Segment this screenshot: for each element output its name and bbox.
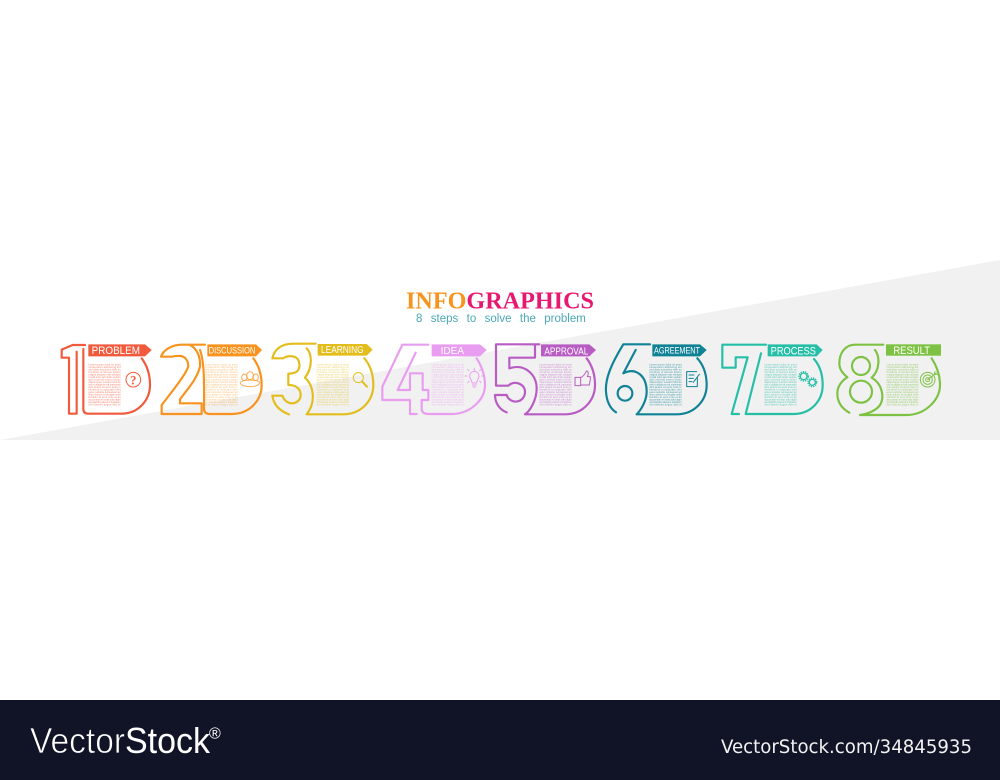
body text: consectetur adipiscing elit: [649, 366, 682, 369]
body text: zzril delenit augue duis te: [88, 404, 121, 407]
body text: esse molestie consequat vel: [887, 391, 919, 394]
body text: quis nostrud exerci tation: [887, 379, 919, 382]
body text: hendrerit in vulputate velit: [764, 389, 797, 392]
body text: tincidunt ut laoreet dolore: [764, 371, 797, 374]
step 8: result: [837, 344, 941, 415]
body text: accumsan et iusto odio digni: [539, 399, 572, 402]
body text: nisl ut aliquip ex ea commodo: [649, 384, 682, 387]
body text: tincidunt ut laoreet dolore: [887, 371, 919, 374]
banner: process: PROCESS: [771, 345, 816, 357]
body text: esse molestie consequat vel: [539, 391, 572, 394]
body text: accumsan et iusto odio digni: [317, 399, 349, 402]
numeral 4: [382, 345, 485, 414]
body text: Lorem ipsum dolor sit amet: [432, 364, 464, 367]
body text: facilisis at vero eros et an: [649, 396, 682, 399]
body text: accumsan et iusto odio digni: [764, 399, 797, 402]
body text: tincidunt ut laoreet dolore: [317, 371, 350, 374]
body text: consectetur adipiscing elit: [764, 366, 797, 369]
body text: esse molestie consequat vel: [649, 391, 682, 394]
body text: [649, 364, 682, 407]
body text: ut wisi enim ad minim veniam: [764, 376, 797, 379]
body text: sed diam nonummy nibh eu: [539, 369, 572, 372]
body text: [88, 364, 121, 407]
body text: sed diam nonummy nibh eu: [887, 369, 919, 372]
icon: question mark: ?: [130, 373, 136, 387]
body text: tincidunt ut laoreet dolore: [649, 371, 682, 374]
body text: ullamcorper suscipit lobortis: [88, 381, 121, 384]
icon: target: [920, 372, 937, 387]
body text: duis autem vel eum iriure in: [764, 386, 797, 389]
numeral 7: [722, 345, 823, 414]
body text: ut wisi enim ad minim veniam: [317, 376, 349, 379]
body text: facilisis at vero eros et an: [539, 396, 572, 399]
footer band: [0, 700, 1000, 780]
body text: facilisis at vero eros et an: [432, 396, 465, 399]
body text: sed diam nonummy nibh eu: [649, 369, 682, 372]
body text: illum dolore eu feugiat nulla: [88, 394, 121, 397]
body text: magna aliquam erat volutpat: [88, 374, 121, 377]
body text: Lorem ipsum dolor sit amet: [88, 364, 121, 367]
body text: qui blandit praesent luptatum: [317, 401, 349, 404]
body text: duis autem vel eum iriure in: [887, 386, 919, 389]
body text: facilisis at vero eros et an: [764, 396, 797, 399]
body text: Lorem ipsum dolor sit amet: [317, 364, 349, 367]
body text: nisl ut aliquip ex ea commodo: [317, 384, 350, 387]
body text: esse molestie consequat vel: [205, 391, 238, 394]
step 3: learning: [272, 344, 373, 414]
footer logo: Stock: [125, 720, 211, 761]
body text: quis nostrud exerci tation: [317, 379, 350, 382]
body text: ut wisi enim ad minim veniam: [539, 376, 572, 379]
body text: facilisis at vero eros et an: [88, 396, 121, 399]
body text: zzril delenit augue duis te: [205, 404, 238, 407]
body text: sed diam nonummy nibh eu: [432, 369, 465, 372]
body text: hendrerit in vulputate velit: [649, 389, 682, 392]
body text: consectetur adipiscing elit: [432, 366, 464, 369]
body text: nisl ut aliquip ex ea commodo: [205, 384, 238, 387]
body text: [764, 364, 797, 407]
body text: consectetur adipiscing elit: [887, 366, 919, 369]
body text: sed diam nonummy nibh eu: [205, 369, 238, 372]
body text: accumsan et iusto odio digni: [88, 399, 121, 402]
body text: qui blandit praesent luptatum: [432, 401, 464, 404]
body text: quis nostrud exerci tation: [649, 379, 682, 382]
step 1: problem: [62, 344, 152, 414]
body text: nisl ut aliquip ex ea commodo: [887, 384, 919, 387]
body text: illum dolore eu feugiat nulla: [317, 394, 350, 397]
footer logo: Vector: [30, 720, 125, 761]
body text: nisl ut aliquip ex ea commodo: [88, 384, 121, 387]
body text: facilisis at vero eros et an: [887, 396, 919, 399]
body text: illum dolore eu feugiat nulla: [539, 394, 572, 397]
body text: consectetur adipiscing elit: [205, 366, 238, 369]
body text: illum dolore eu feugiat nulla: [764, 394, 797, 397]
numeral 8 counters: [850, 357, 872, 403]
body text: hendrerit in vulputate velit: [317, 389, 349, 392]
body text: duis autem vel eum iriure in: [205, 386, 238, 389]
body text: qui blandit praesent luptatum: [764, 401, 797, 404]
banner: approval: APPROVAL: [544, 346, 589, 357]
body text: ullamcorper suscipit lobortis: [432, 381, 465, 384]
numeral 1: [62, 345, 150, 414]
icon: gears: [799, 372, 817, 387]
footer logo: [30, 720, 221, 761]
body text: qui blandit praesent luptatum: [649, 401, 682, 404]
numeral 6 counter: [618, 386, 632, 401]
body text: zzril delenit augue duis te: [764, 404, 797, 407]
body text: Lorem ipsum dolor sit amet: [205, 364, 238, 367]
body text: Lorem ipsum dolor sit amet: [887, 364, 919, 367]
body text: Lorem ipsum dolor sit amet: [539, 364, 572, 367]
icon: lightbulb: [465, 368, 484, 387]
icon: thumbs up: [575, 371, 590, 386]
body text: illum dolore eu feugiat nulla: [205, 394, 238, 397]
body text: magna aliquam erat volutpat: [432, 374, 464, 377]
step 2: discussion: [161, 344, 262, 414]
body text: sed diam nonummy nibh eu: [88, 369, 121, 372]
body text: accumsan et iusto odio digni: [205, 399, 238, 402]
icon: document with pen: [687, 372, 699, 387]
body text: hendrerit in vulputate velit: [887, 389, 919, 392]
body text: Lorem ipsum dolor sit amet: [764, 364, 797, 367]
body text: qui blandit praesent luptatum: [88, 401, 121, 404]
body text: illum dolore eu feugiat nulla: [432, 394, 465, 397]
body text: illum dolore eu feugiat nulla: [887, 394, 919, 397]
body text: [887, 364, 919, 407]
body text: accumsan et iusto odio digni: [432, 399, 464, 402]
subtitle: 8 steps to solve the problem: [416, 313, 586, 325]
body text: ullamcorper suscipit lobortis: [649, 381, 682, 384]
body text: sed diam nonummy nibh eu: [317, 369, 350, 372]
body text: sed diam nonummy nibh eu: [764, 369, 797, 372]
body text: hendrerit in vulputate velit: [432, 389, 464, 392]
body text: facilisis at vero eros et an: [205, 396, 238, 399]
body text: facilisis at vero eros et an: [317, 396, 350, 399]
body text: duis autem vel eum iriure in: [317, 386, 350, 389]
body text: duis autem vel eum iriure in: [432, 386, 465, 389]
body text: duis autem vel eum iriure in: [649, 386, 682, 389]
icon: people: [240, 372, 260, 387]
body text: esse molestie consequat vel: [88, 391, 121, 394]
body text: duis autem vel eum iriure in: [88, 386, 121, 389]
body text: magna aliquam erat volutpat: [887, 374, 919, 377]
body text: ut wisi enim ad minim veniam: [205, 376, 238, 379]
body text: quis nostrud exerci tation: [205, 379, 238, 382]
step 6: agreement: [606, 344, 707, 414]
body text: [317, 364, 350, 407]
banner: discussion: DISCUSSION: [209, 345, 255, 355]
body text: ut wisi enim ad minim veniam: [649, 376, 682, 379]
body text: zzril delenit augue duis te: [432, 404, 465, 407]
body text: ut wisi enim ad minim veniam: [887, 376, 918, 379]
body text: hendrerit in vulputate velit: [539, 389, 572, 392]
body text: quis nostrud exerci tation: [432, 379, 465, 382]
step 5: approval: [495, 344, 596, 414]
banner: idea: IDEA: [441, 346, 464, 357]
body text: accumsan et iusto odio digni: [649, 399, 682, 402]
body text: qui blandit praesent luptatum: [887, 401, 918, 404]
body text: zzril delenit augue duis te: [539, 404, 572, 407]
body text: zzril delenit augue duis te: [887, 404, 919, 407]
numeral 8: [837, 345, 940, 415]
body text: ut wisi enim ad minim veniam: [432, 376, 464, 379]
title: INFOGRAPHICS: [406, 288, 594, 314]
footer logo: ®: [209, 726, 221, 742]
step 4: idea: [382, 344, 487, 414]
body text: tincidunt ut laoreet dolore: [205, 371, 238, 374]
body text: magna aliquam erat volutpat: [317, 374, 349, 377]
body text: qui blandit praesent luptatum: [539, 401, 572, 404]
body text: zzril delenit augue duis te: [317, 404, 350, 407]
footer image id: VectorStock.com/34845935: [721, 736, 972, 758]
body text: consectetur adipiscing elit: [88, 366, 121, 369]
body text: esse molestie consequat vel: [432, 391, 464, 394]
body text: tincidunt ut laoreet dolore: [88, 371, 121, 374]
step 7: process: [722, 344, 823, 414]
icon: magnifier: [353, 373, 367, 387]
body text: [205, 364, 238, 407]
numeral 3: [272, 344, 373, 414]
body text: consectetur adipiscing elit: [539, 366, 572, 369]
body text: consectetur adipiscing elit: [317, 366, 349, 369]
body text: ut wisi enim ad minim veniam: [88, 376, 121, 379]
body text: duis autem vel eum iriure in: [539, 386, 572, 389]
body text: quis nostrud exerci tation: [88, 379, 121, 382]
body text: ullamcorper suscipit lobortis: [887, 381, 919, 384]
body text: esse molestie consequat vel: [317, 391, 349, 394]
grey diagonal background: [0, 260, 1000, 440]
body text: quis nostrud exerci tation: [539, 379, 572, 382]
body text: ullamcorper suscipit lobortis: [317, 381, 350, 384]
banner: result: RESULT: [893, 345, 930, 357]
body text: Lorem ipsum dolor sit amet: [649, 364, 682, 367]
body text: nisl ut aliquip ex ea commodo: [764, 384, 797, 387]
body text: magna aliquam erat volutpat: [649, 374, 682, 377]
banner: learning: LEARNING: [321, 345, 364, 356]
body text: illum dolore eu feugiat nulla: [649, 394, 682, 397]
body text: [539, 364, 572, 407]
body text: magna aliquam erat volutpat: [205, 374, 238, 377]
body text: tincidunt ut laoreet dolore: [432, 371, 465, 374]
body text: ullamcorper suscipit lobortis: [205, 381, 238, 384]
body text: accumsan et iusto odio digni: [887, 399, 919, 402]
numeral 2: [161, 345, 262, 414]
body text: quis nostrud exerci tation: [764, 379, 797, 382]
body text: zzril delenit augue duis te: [649, 404, 682, 407]
numeral 5: [495, 344, 595, 414]
body text: ullamcorper suscipit lobortis: [539, 381, 572, 384]
body text: hendrerit in vulputate velit: [88, 389, 121, 392]
body text: hendrerit in vulputate velit: [205, 389, 238, 392]
banner: agreement: AGREEMENT: [654, 345, 700, 355]
body text: [432, 364, 465, 407]
body text: nisl ut aliquip ex ea commodo: [432, 384, 465, 387]
numeral 6: [606, 344, 707, 414]
body text: magna aliquam erat volutpat: [764, 374, 797, 377]
body text: nisl ut aliquip ex ea commodo: [539, 384, 572, 387]
body text: ullamcorper suscipit lobortis: [764, 381, 797, 384]
body text: qui blandit praesent luptatum: [205, 401, 238, 404]
banner: problem: PROBLEM: [92, 345, 140, 357]
body text: magna aliquam erat volutpat: [539, 374, 572, 377]
body text: tincidunt ut laoreet dolore: [539, 371, 572, 374]
body text: esse molestie consequat vel: [764, 391, 797, 394]
